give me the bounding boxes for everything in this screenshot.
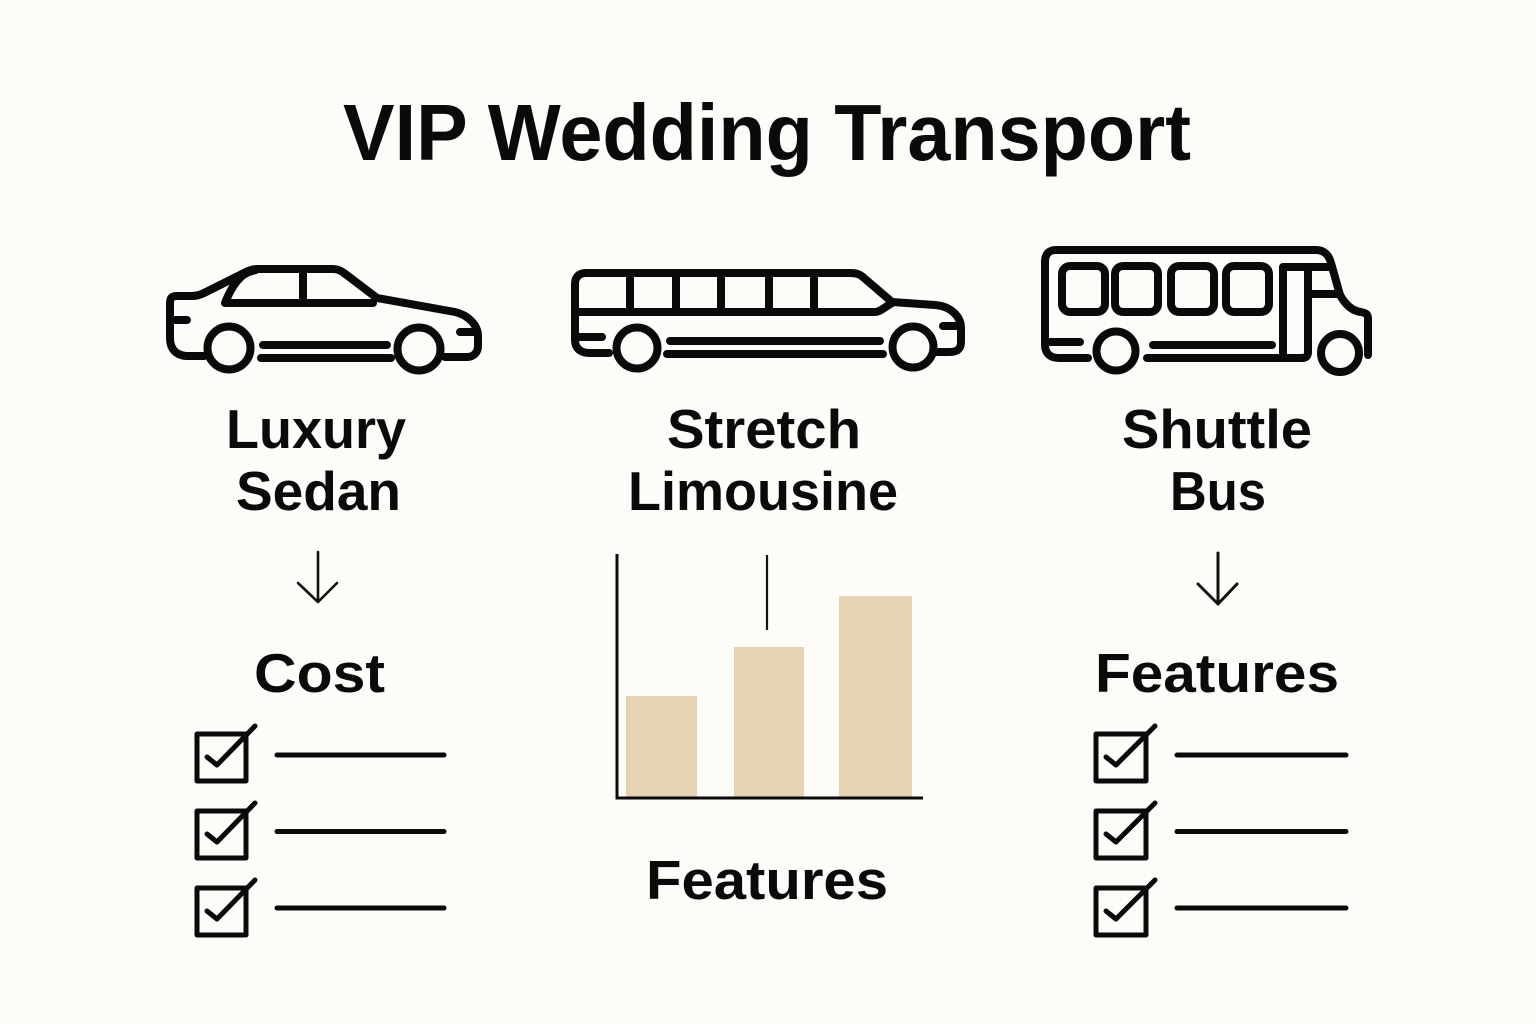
heading: cost: Cost (254, 642, 385, 704)
panel: shuttle bus (1045, 250, 1368, 935)
bar 1 (626, 696, 697, 797)
icon: sedan car (170, 269, 478, 370)
icon: stretch limousine (575, 273, 961, 368)
heading: luxury sedan: Luxury (226, 398, 406, 460)
heading: stretch limousine: Stretch (667, 398, 861, 460)
bar 3 (839, 596, 912, 797)
heading: luxury sedan (226, 398, 406, 522)
heading: shuttle bus (1122, 398, 1312, 522)
heading: stretch limousine (628, 398, 898, 522)
chart axes (617, 554, 923, 798)
bar 2 (734, 647, 804, 797)
title: VIP Wedding Transport (343, 88, 1191, 177)
checklist: cost (197, 726, 444, 935)
icon: shuttle bus (1045, 250, 1368, 372)
arrow: bus to features (1198, 553, 1237, 604)
chart marker line (766, 555, 768, 630)
heading: luxury sedan: Sedan (236, 460, 401, 522)
arrow: sedan to cost (298, 552, 337, 602)
panel: luxury sedan (170, 269, 478, 935)
bar chart (617, 554, 923, 798)
heading: features (centre): Features (646, 849, 888, 911)
heading: features (right): Features (1095, 642, 1339, 704)
heading: shuttle bus: Shuttle (1122, 398, 1312, 460)
panel: stretch limousine (575, 273, 961, 911)
heading: stretch limousine: Limousine (628, 460, 898, 522)
checklist: features (1096, 726, 1346, 935)
heading: shuttle bus: Bus (1170, 460, 1266, 522)
